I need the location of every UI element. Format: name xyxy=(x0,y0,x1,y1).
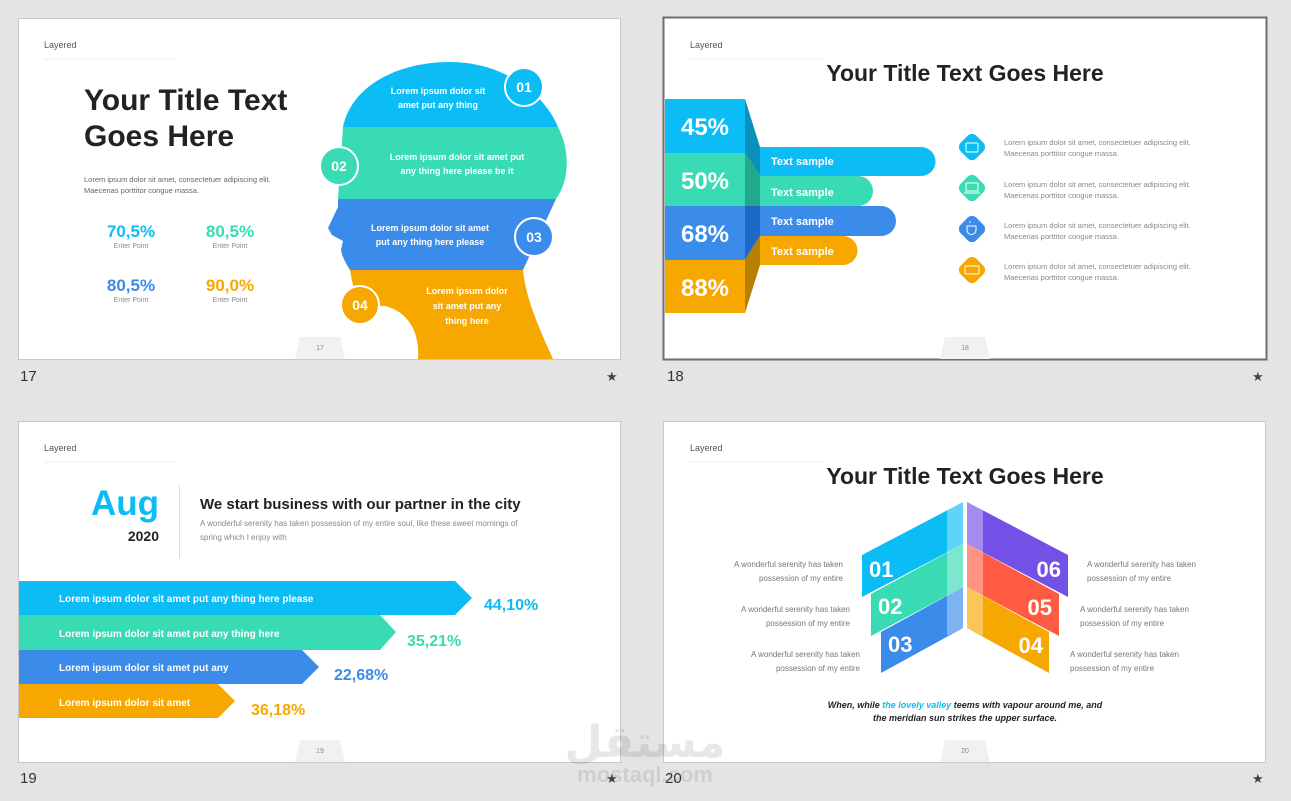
slide numbers: ★ xyxy=(1252,771,1264,786)
chart: head layers: Lorem ipsum dolor sit amet xyxy=(371,223,489,233)
slide numbers: 20 xyxy=(665,770,682,787)
heading: We start business with our partner in the city xyxy=(200,496,521,513)
watermark: mostaql.com xyxy=(577,762,713,787)
icons list: Maecenas porttitor congue massa. xyxy=(1004,149,1119,158)
label: layered: Layered xyxy=(44,40,77,50)
chart: head layers: 04 xyxy=(352,297,368,313)
chart: chevron layers: possession of my entire xyxy=(776,664,861,673)
chart: chevron layers: 01 xyxy=(869,557,893,582)
chart: percent blocks: 88% xyxy=(681,275,729,302)
panel: slide 19: Layered xyxy=(44,443,77,453)
icons list: Lorem ipsum dolor sit amet, consectetuer adipiscing elit. xyxy=(1004,221,1191,230)
stats: 90,0% xyxy=(206,276,254,295)
panel: slide 17: 17 xyxy=(316,345,324,352)
slide numbers: 17 xyxy=(20,368,37,385)
chart: arrow bars: Lorem ipsum dolor sit amet put any thing here please xyxy=(59,594,314,605)
chart: arrow bars: 36,18% xyxy=(251,702,305,719)
stats xyxy=(107,222,254,304)
chart: head layers: Lorem ipsum dolor sit xyxy=(391,86,485,96)
chart: head layers: 02 xyxy=(331,158,347,174)
panel: slide 19: A wonderful serenity has taken possession of my entire soul, like these sweet mornings of xyxy=(200,519,518,528)
panel: slide 19: 19 xyxy=(316,748,324,755)
icons list: Maecenas porttitor congue massa. xyxy=(1004,191,1119,200)
chart: chevron layers: A wonderful serenity has taken xyxy=(1087,560,1196,569)
title: Your Title Text Goes Here xyxy=(826,463,1104,489)
chart: head layers: sit amet put any xyxy=(433,301,501,311)
icons list: Lorem ipsum dolor sit amet, consectetuer adipiscing elit. xyxy=(1004,262,1191,271)
slide numbers: ★ xyxy=(606,369,618,384)
chart: percent blocks: Text sample xyxy=(771,156,834,168)
chart: percent blocks: 45% xyxy=(681,114,729,141)
chart: chevron layers: 02 xyxy=(878,594,902,619)
chart: head layers: 01 xyxy=(516,79,532,95)
stats: Enter Point xyxy=(213,297,247,304)
chart: head layers: any thing here please be it xyxy=(400,166,514,176)
chart: head layers xyxy=(320,55,580,360)
slide numbers: 18 xyxy=(667,368,684,385)
icons list: Lorem ipsum dolor sit amet, consectetuer adipiscing elit. xyxy=(1004,138,1191,147)
chart: chevron layers: possession of my entire xyxy=(1070,664,1155,673)
chart: head layers: put any thing here please xyxy=(376,237,484,247)
chart: chevron layers: 05 xyxy=(1028,595,1052,620)
icons list: Lorem ipsum dolor sit amet, consectetuer adipiscing elit. xyxy=(1004,180,1191,189)
chart: arrow bars: Lorem ipsum dolor sit amet xyxy=(59,698,191,709)
panel: slide 19 xyxy=(18,422,620,762)
chart: percent blocks: 68% xyxy=(681,221,729,248)
stats: Enter Point xyxy=(213,243,247,250)
stats: 80,5% xyxy=(107,276,155,295)
date: Aug xyxy=(91,484,159,523)
chart: arrow bars: 22,68% xyxy=(334,667,388,684)
panel: slide 19: 2020 xyxy=(128,528,159,544)
icons list: Maecenas porttitor congue massa. xyxy=(1004,273,1119,282)
chart: percent blocks: Text sample xyxy=(771,216,834,228)
slide numbers: ★ xyxy=(606,771,618,786)
slide numbers: 19 xyxy=(20,770,37,787)
text block: Maecenas porttitor congue massa. xyxy=(84,186,199,195)
chart: chevron layers xyxy=(734,502,1196,673)
title: Your Title Text Goes Here xyxy=(826,60,1104,86)
stats: 70,5% xyxy=(107,222,155,241)
chart: arrow bars: 35,21% xyxy=(407,633,461,650)
chart: percent blocks xyxy=(665,99,936,313)
chart: chevron layers: possession of my entire xyxy=(766,619,851,628)
chart: chevron layers: A wonderful serenity has taken xyxy=(751,650,860,659)
chart: head layers: Lorem ipsum dolor sit amet put xyxy=(390,152,524,162)
chart: chevron layers: A wonderful serenity has taken xyxy=(1080,605,1189,614)
chart: head layers: thing here xyxy=(445,316,489,326)
title: Your Title Text xyxy=(84,84,287,117)
icons list: Maecenas porttitor congue massa. xyxy=(1004,232,1119,241)
chart: percent blocks: Text sample xyxy=(771,246,834,258)
panel: slide 20: Layered xyxy=(690,443,723,453)
chart: chevron layers: possession of my entire xyxy=(759,574,844,583)
chart: arrow bars xyxy=(19,581,538,719)
slide numbers: ★ xyxy=(1252,369,1264,384)
slide numbers xyxy=(20,368,1264,787)
chart: arrow bars: Lorem ipsum dolor sit amet put any thing here xyxy=(59,629,280,640)
chart: chevron layers: possession of my entire xyxy=(1080,619,1165,628)
icons list xyxy=(956,131,1191,286)
chart: percent blocks: 50% xyxy=(681,168,729,195)
chart: arrow bars: Lorem ipsum dolor sit amet put any xyxy=(59,663,229,674)
quote: When, while the lovely valley teems with vapour around me, and xyxy=(828,700,1103,710)
title: Goes Here xyxy=(84,120,234,153)
panel: slide 19: spring which I enjoy with xyxy=(200,533,287,542)
chart: percent blocks: Text sample xyxy=(771,187,834,199)
chart: chevron layers: A wonderful serenity has taken xyxy=(1070,650,1179,659)
stats: Enter Point xyxy=(114,243,148,250)
chart: arrow bars: 44,10% xyxy=(484,597,538,614)
watermark: مستقل xyxy=(565,717,725,768)
chart: head layers: amet put any thing xyxy=(398,100,478,110)
stats: Enter Point xyxy=(114,297,148,304)
chart: chevron layers: A wonderful serenity has taken xyxy=(734,560,843,569)
chart: head layers: Lorem ipsum dolor xyxy=(426,286,508,296)
panel: slide 20: the meridian sun strikes the upper surface. xyxy=(873,713,1057,723)
chart: chevron layers: 04 xyxy=(1019,633,1044,658)
chart: chevron layers: 06 xyxy=(1037,557,1061,582)
chart: chevron layers: A wonderful serenity has taken xyxy=(741,605,850,614)
panel: slide 18: Layered xyxy=(690,40,723,50)
stats: 80,5% xyxy=(206,222,254,241)
chart: chevron layers: possession of my entire xyxy=(1087,574,1172,583)
panel: slide 18 xyxy=(664,18,1266,360)
chart: head layers: 03 xyxy=(526,229,542,245)
panel: slide 20 xyxy=(664,422,1266,762)
text block: Lorem ipsum dolor sit amet, consectetuer adipiscing elit. xyxy=(84,175,271,184)
panel: slide 17 xyxy=(18,18,620,360)
chart: chevron layers: 03 xyxy=(888,632,912,657)
panel: slide 20: 20 xyxy=(961,748,969,755)
page tab xyxy=(295,337,345,359)
panel: slide 18: 18 xyxy=(961,345,969,352)
